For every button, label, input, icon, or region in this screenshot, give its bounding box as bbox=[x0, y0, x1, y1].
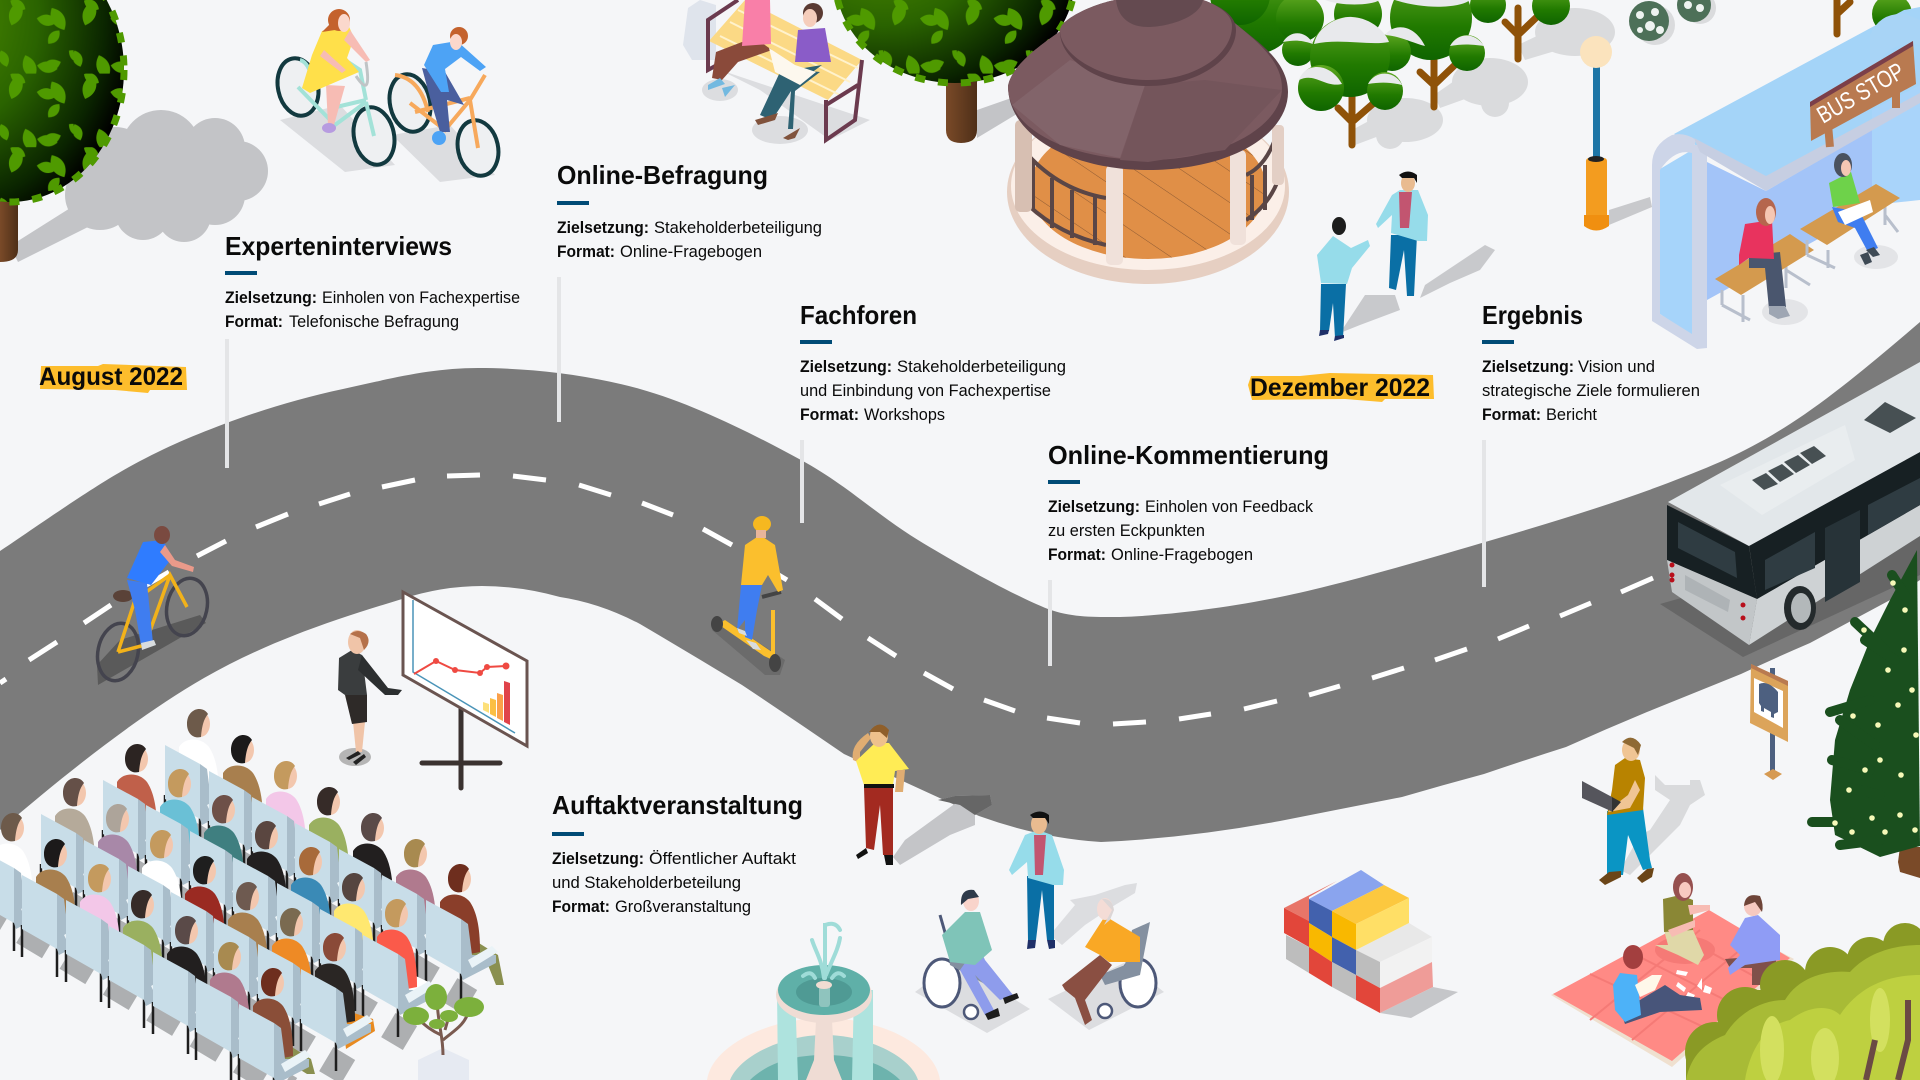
step: Online-Kommentierung: Format: bbox=[1048, 545, 1106, 564]
person pink bbox=[708, 0, 772, 97]
bicycle bbox=[92, 574, 213, 685]
presenter shadow bbox=[339, 748, 371, 766]
gazebo railing right bbox=[1246, 130, 1280, 220]
tree top left bbox=[0, 0, 268, 262]
date label: August 2022: August 2022 bbox=[39, 363, 183, 391]
presentation board bbox=[403, 592, 527, 746]
step: Online-Kommentierung bbox=[1048, 440, 1329, 666]
wheelchair left bbox=[915, 890, 1030, 1033]
tree behind gazebo bbox=[835, 0, 1075, 143]
back glass bbox=[1707, 125, 1880, 300]
picnic group bbox=[1551, 873, 1794, 1067]
gazebo upper roof tier bbox=[1060, 0, 1236, 86]
ground shadow bbox=[280, 105, 495, 182]
step: Fachforen: Fachforen bbox=[800, 300, 917, 330]
step: Experteninterviews: Telefonische Befragung bbox=[289, 312, 459, 331]
person bbox=[960, 945, 1013, 1015]
bicycle man bbox=[384, 70, 503, 180]
step: Fachforen: Workshops bbox=[864, 405, 945, 424]
man in jacket near wheelchairs bbox=[1009, 812, 1137, 949]
presenter bbox=[338, 630, 402, 765]
bus side windows bbox=[1749, 452, 1920, 599]
bus stop sign board bbox=[1810, 41, 1916, 147]
bin bbox=[683, 0, 716, 60]
shadows bbox=[1340, 245, 1495, 333]
cube top faces bbox=[1284, 881, 1337, 921]
shadow bbox=[1050, 883, 1137, 945]
front post bbox=[1652, 134, 1707, 349]
board chart bbox=[413, 600, 515, 733]
step: Online-Kommentierung: Online-Kommentierung bbox=[1048, 440, 1329, 470]
christmas tree bbox=[1812, 550, 1920, 878]
lamp pole bbox=[1593, 66, 1600, 160]
cards bbox=[1676, 970, 1712, 1000]
trunks bbox=[1338, 0, 1850, 145]
blanket bbox=[1551, 914, 1794, 1067]
step: Online-Befragung: Stakeholderbeteiligung bbox=[654, 218, 822, 237]
bowl bbox=[776, 967, 872, 1023]
head bbox=[1622, 739, 1640, 761]
bus side lower bbox=[1749, 505, 1920, 645]
step: Auftaktveranstaltung: Auftaktveranstaltung bbox=[552, 790, 803, 820]
lamp shadow bbox=[1609, 197, 1652, 225]
step: Ergebnis: Vision und bbox=[1578, 357, 1655, 376]
shadow bbox=[1620, 775, 1705, 875]
step: Experteninterviews bbox=[225, 231, 520, 468]
step: Online-Befragung: Online-Befragung bbox=[557, 160, 768, 190]
bench frame bbox=[708, 0, 862, 140]
cyclist on road bbox=[92, 526, 213, 685]
snow covered trees bbox=[1210, 0, 1912, 149]
tree foliage bbox=[1830, 550, 1920, 857]
seated woman green with book bbox=[1829, 153, 1880, 265]
step: Ergebnis: strategische Ziele formulieren bbox=[1482, 381, 1700, 400]
cyclist woman bbox=[302, 9, 370, 133]
step: Experteninterviews: Zielsetzung: bbox=[225, 288, 317, 307]
bus stop post bbox=[1750, 664, 1788, 780]
audience seating bbox=[0, 709, 504, 1080]
row A bbox=[165, 709, 504, 1002]
roof beam bbox=[1694, 93, 1920, 191]
foliage bbox=[1210, 0, 1912, 111]
waterfall bbox=[777, 990, 873, 1080]
man shadow on road and ground bbox=[893, 795, 992, 865]
tree trunk bbox=[1898, 847, 1920, 878]
row C bbox=[41, 778, 375, 1071]
bushes bbox=[1629, 0, 1716, 45]
lamp globe bbox=[1580, 36, 1612, 68]
standing presenter and board bbox=[338, 592, 527, 788]
step: Online-Kommentierung: Online-Fragebogen bbox=[1111, 545, 1253, 564]
step: Ergebnis: Ergebnis bbox=[1482, 300, 1583, 330]
cube shadow bbox=[1380, 987, 1458, 1018]
step: Experteninterviews: Experteninterviews bbox=[225, 231, 452, 261]
tail lights bbox=[1670, 562, 1746, 620]
step: Auftaktveranstaltung: Großveranstaltung bbox=[615, 897, 751, 916]
bus shelter bbox=[1652, 7, 1920, 349]
cube right faces bbox=[1356, 898, 1409, 950]
rider body bbox=[737, 516, 783, 650]
road centre dashes bbox=[0, 475, 1653, 724]
shadow bbox=[97, 615, 206, 685]
step: Online-Befragung bbox=[557, 160, 822, 422]
gazebo columns bbox=[1015, 120, 1284, 265]
bench seat bbox=[709, 0, 862, 100]
bus wheel bbox=[1784, 586, 1816, 630]
roof vents bbox=[1752, 402, 1916, 490]
scooter rider bbox=[711, 516, 785, 675]
cube left faces bbox=[1284, 908, 1309, 947]
step: Ergebnis: Bericht bbox=[1546, 405, 1597, 424]
man from behind bbox=[1317, 217, 1370, 341]
step: Ergebnis bbox=[1482, 300, 1700, 587]
step: Fachforen: Stakeholderbeteiligung bbox=[897, 357, 1066, 376]
snow caps bbox=[1283, 0, 1484, 85]
step: Fachforen: und Einbindung von Fachexpertise bbox=[800, 381, 1051, 400]
gazebo platform bbox=[1007, 100, 1289, 284]
laptop man bbox=[1582, 738, 1705, 885]
floor shadows bbox=[0, 835, 470, 1080]
bench shadows bbox=[702, 79, 808, 144]
step: Online-Kommentierung: Einholen von Feedback bbox=[1145, 497, 1313, 516]
step: Fachforen: Format: bbox=[800, 405, 859, 424]
cyclist man bbox=[422, 27, 486, 145]
gazebo floor bbox=[1030, 117, 1266, 259]
road bbox=[0, 322, 1920, 842]
outer foliage bbox=[1685, 923, 1920, 1080]
step: Auftaktveranstaltung bbox=[552, 790, 803, 916]
front foliage bbox=[1745, 975, 1920, 1080]
basin bbox=[707, 1018, 940, 1080]
two men talking bbox=[1317, 172, 1495, 341]
street lamp bbox=[1580, 36, 1652, 230]
laptop bbox=[1582, 781, 1613, 812]
seated woman red bbox=[1739, 198, 1790, 319]
bus roof bbox=[1668, 362, 1920, 546]
bus bbox=[1660, 362, 1920, 657]
gazebo railing left bbox=[1028, 155, 1106, 245]
man in jacket bbox=[1376, 172, 1428, 296]
shirt bbox=[1607, 758, 1645, 815]
phone man bbox=[853, 724, 909, 865]
roof bbox=[1674, 7, 1920, 181]
trunk shadow bbox=[977, 95, 1040, 138]
wheelchair right bbox=[1048, 898, 1164, 1030]
cyclists couple bbox=[272, 9, 503, 182]
woman in olive bbox=[1655, 873, 1715, 965]
platform bbox=[1048, 962, 1164, 1030]
step: Online-Kommentierung: Zielsetzung: bbox=[1048, 497, 1140, 516]
bus shadow bbox=[1660, 530, 1920, 657]
step: Ergebnis: Zielsetzung: bbox=[1482, 357, 1574, 376]
step: Experteninterviews: Einholen von Fachexpertise bbox=[322, 288, 520, 307]
person in blue from behind bbox=[1613, 945, 1702, 1024]
platform bbox=[915, 962, 1030, 1033]
tree lights bbox=[1832, 580, 1919, 835]
step: Online-Kommentierung: zu ersten Eckpunkten bbox=[1048, 521, 1205, 540]
step: Online-Befragung: Format: bbox=[557, 242, 615, 261]
chair bbox=[1120, 959, 1156, 1007]
bus rear bbox=[1667, 505, 1757, 599]
willow tree bbox=[1685, 923, 1920, 1080]
gazebo bbox=[1007, 0, 1289, 284]
column bbox=[806, 1020, 842, 1080]
step: Auftaktveranstaltung: Öffentlicher Auftakt bbox=[649, 849, 796, 868]
man with phone bbox=[853, 724, 992, 865]
step: Fachforen: Zielsetzung: bbox=[800, 357, 892, 376]
person purple with laptop bbox=[755, 3, 831, 140]
step: Experteninterviews: Format: bbox=[225, 312, 283, 331]
bench 1 bbox=[1715, 234, 1814, 325]
gazebo roof bbox=[1008, 0, 1288, 170]
step: Auftaktveranstaltung: Zielsetzung: bbox=[552, 849, 644, 868]
row D bbox=[0, 813, 315, 1080]
far arch bbox=[1870, 14, 1920, 110]
tree shadow bbox=[10, 110, 268, 262]
bench 2 bbox=[1800, 184, 1900, 269]
cube seating bbox=[1284, 870, 1458, 1018]
person bbox=[1062, 955, 1112, 1025]
potted plant bbox=[403, 984, 484, 1080]
bus icon bbox=[1759, 683, 1778, 718]
date label: Dezember 2022: Dezember 2022 bbox=[1250, 374, 1430, 402]
bench with two people bbox=[683, 0, 870, 144]
arm bbox=[1608, 780, 1640, 812]
scooter bbox=[711, 592, 781, 672]
tree crown bbox=[0, 0, 124, 202]
branches bbox=[1866, 1000, 1908, 1080]
chair bbox=[924, 959, 960, 1007]
step: Online-Befragung: Online-Fragebogen bbox=[620, 242, 762, 261]
lamp base bbox=[1586, 158, 1607, 223]
step: Fachforen bbox=[800, 300, 1066, 523]
step: Auftaktveranstaltung: und Stakeholderbeteilung bbox=[552, 873, 741, 892]
man in lilac bbox=[1725, 895, 1780, 985]
fountain bbox=[707, 924, 940, 1080]
rider bbox=[113, 526, 194, 650]
crown bbox=[835, 0, 1075, 83]
middle foliage bbox=[1686, 945, 1920, 1080]
bicycle woman bbox=[272, 54, 400, 169]
tree shadows bbox=[1352, 8, 1615, 149]
water spout bbox=[803, 924, 844, 978]
step: Ergebnis: Format: bbox=[1482, 405, 1541, 424]
trunk bbox=[946, 70, 977, 143]
tree trunk bbox=[0, 190, 18, 262]
step: Auftaktveranstaltung: Format: bbox=[552, 897, 610, 916]
jeans bbox=[1607, 808, 1652, 875]
step: Online-Befragung: Zielsetzung: bbox=[557, 218, 649, 237]
board stand bbox=[422, 709, 500, 788]
row B bbox=[103, 744, 435, 1037]
front glass bbox=[1660, 150, 1696, 338]
scooter shadow bbox=[712, 620, 785, 675]
